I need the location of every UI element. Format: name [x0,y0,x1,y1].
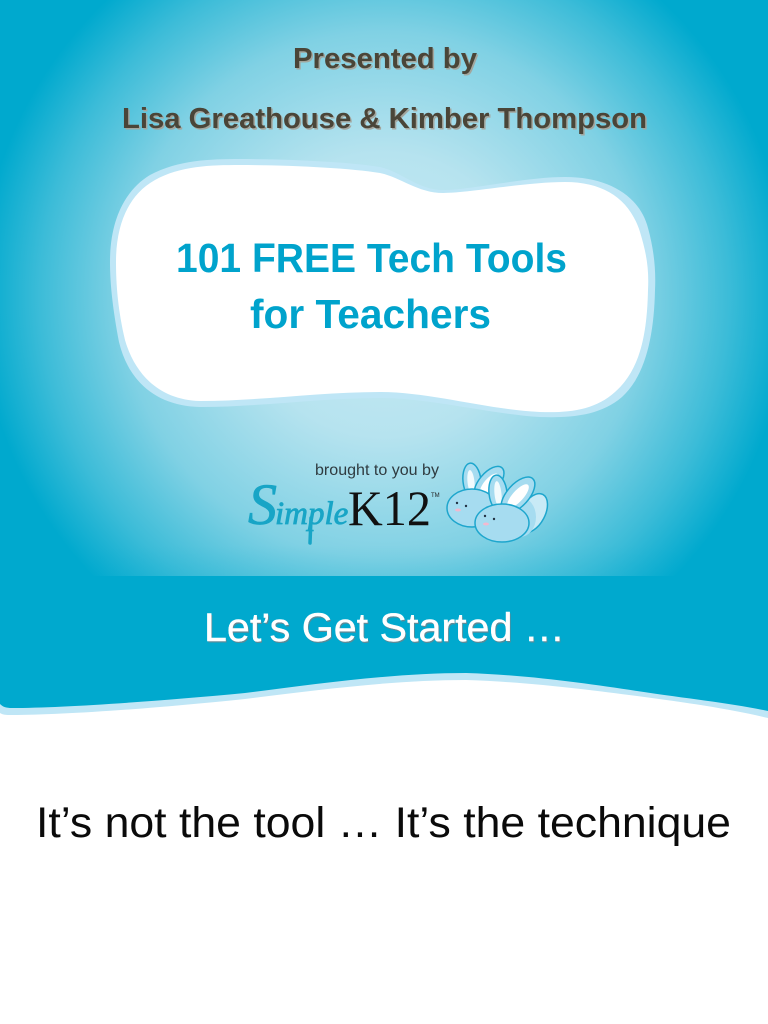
heading: let's get started: Let’s Get Started … [205,608,566,652]
brought to you by: brought to you by [315,462,439,479]
presenters heading: Lisa Greathouse & Kimber Thompson [122,103,647,135]
SimpleK12 logo [248,461,553,543]
icon: bunny slippers [447,461,553,542]
wordmark: TM [431,493,440,499]
background gradient panel [0,0,768,580]
presenters heading: Presented by [293,43,477,75]
banner wave [0,576,768,740]
wordmark: K12 [348,480,431,536]
title [176,235,567,337]
presenters heading: Presented by [294,44,478,76]
presenters heading: Lisa Greathouse & Kimber Thompson [124,104,648,136]
heading: let's get started: Let’s Get Started … [204,606,565,650]
wordmark [248,472,440,543]
presenters heading [122,43,648,136]
title: 101 FREE Tech Tools [176,235,567,281]
panel: white cloud title box [110,159,655,417]
wordmark: imple [275,496,348,532]
wordmark: S [248,472,277,537]
body statement: It’s not the tool … It’s the technique [36,799,731,847]
title: for Teachers [250,291,491,337]
